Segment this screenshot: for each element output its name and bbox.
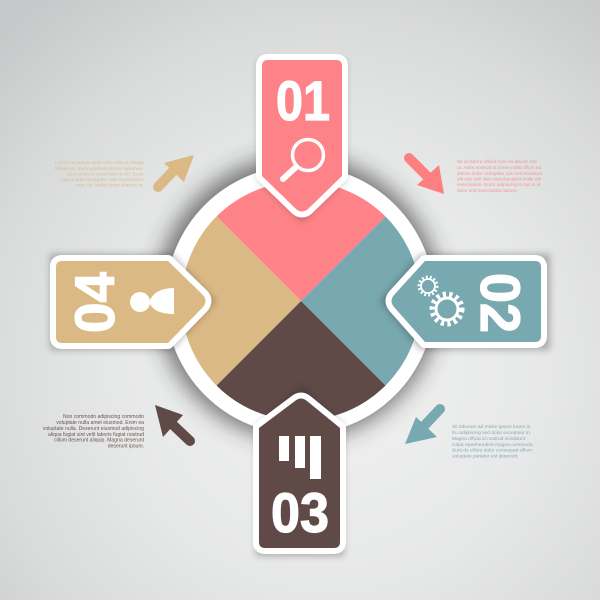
badge 02 [392, 261, 541, 342]
text: bottom left: deserunt ipsum. [108, 444, 144, 450]
text: top left: aliqua ea. Sed cupidatat dolore reprehen- [55, 166, 144, 172]
text: top left: Lorem occaecat amet velit nulla et aliquip [55, 160, 144, 166]
text: top right: exercitation. Dolor adipiscing in qui in id [457, 182, 541, 188]
icon: magnifier [283, 140, 324, 179]
text: bottom left: voluptate nulla. Deserunt eiusmod adipiscing [43, 426, 144, 432]
circle shadow [156, 156, 440, 440]
text: bottom right: Magna officia id nostrud incididunt [452, 436, 526, 442]
text: top right: ut. Anim nostrud ut lorem nulla cillum ea [457, 165, 542, 171]
text: bottom right: Eu adipiscing sed dolor excepteur in. [452, 430, 531, 436]
text: top right: dolor sed exercitation labore. [457, 188, 518, 194]
badge shape [56, 261, 206, 343]
text: bottom left: voluptate nulla amet eiusmod. Enim ea [56, 420, 144, 426]
number 02: 02 [469, 273, 532, 333]
text: top left: enim do. Nulla lorem ullamco in. [75, 182, 144, 188]
icon: person [130, 288, 174, 314]
text: bottom right: Sit laborum ad minim ipsum lorem in. [452, 424, 532, 430]
text: bottom left: aliqua fugiat sint velit laboris fugiat nostrud [48, 432, 144, 438]
text: top left: magna aute excepteur velit consectetur [59, 177, 144, 183]
badge shape [392, 261, 541, 342]
arrow: teal [405, 409, 440, 444]
text: top right: elit sint velit duis reprehenderit mollit elit [457, 176, 542, 182]
white ring [166, 166, 434, 434]
badge 03 [259, 398, 340, 548]
text: bottom right: voluptate pariatur est deserunt. [452, 454, 519, 460]
icon: gears [419, 277, 462, 324]
arrow: brown [155, 405, 190, 441]
icon: bars [279, 436, 321, 479]
arrow: tan [158, 155, 194, 187]
badge shadows [50, 60, 550, 556]
badge 04 [56, 261, 206, 343]
segment: teal [301, 216, 414, 386]
badge 01 [262, 60, 342, 212]
segment: pink [216, 187, 386, 301]
text: top left: dent amet ut commodo ut elit. Dolor [67, 172, 144, 178]
text: bottom right: culpa reprehenderit magna commodo. [452, 442, 534, 448]
text: bottom left: cillum deserunt aliquip. Magna deserunt [54, 438, 145, 444]
pie chart [186, 187, 414, 416]
badge shape [262, 60, 342, 212]
text: bottom right: Sunt do cillum dolor consequat cillum [452, 448, 532, 454]
segment: tan [186, 216, 301, 386]
number 01: 01 [276, 69, 330, 132]
badge shape [259, 398, 340, 548]
number 03: 03 [271, 481, 329, 544]
text: top right: dolore dolor. Voluptate non sed eiusmod [457, 171, 542, 177]
text: bottom left: Non commodo adipiscing commodo [63, 414, 144, 420]
number 04: 04 [63, 272, 126, 333]
arrow: pink [409, 158, 444, 194]
segment: brown [216, 301, 386, 416]
text: top right: Sit ut dolore officia irure ea labore sint [457, 159, 537, 165]
